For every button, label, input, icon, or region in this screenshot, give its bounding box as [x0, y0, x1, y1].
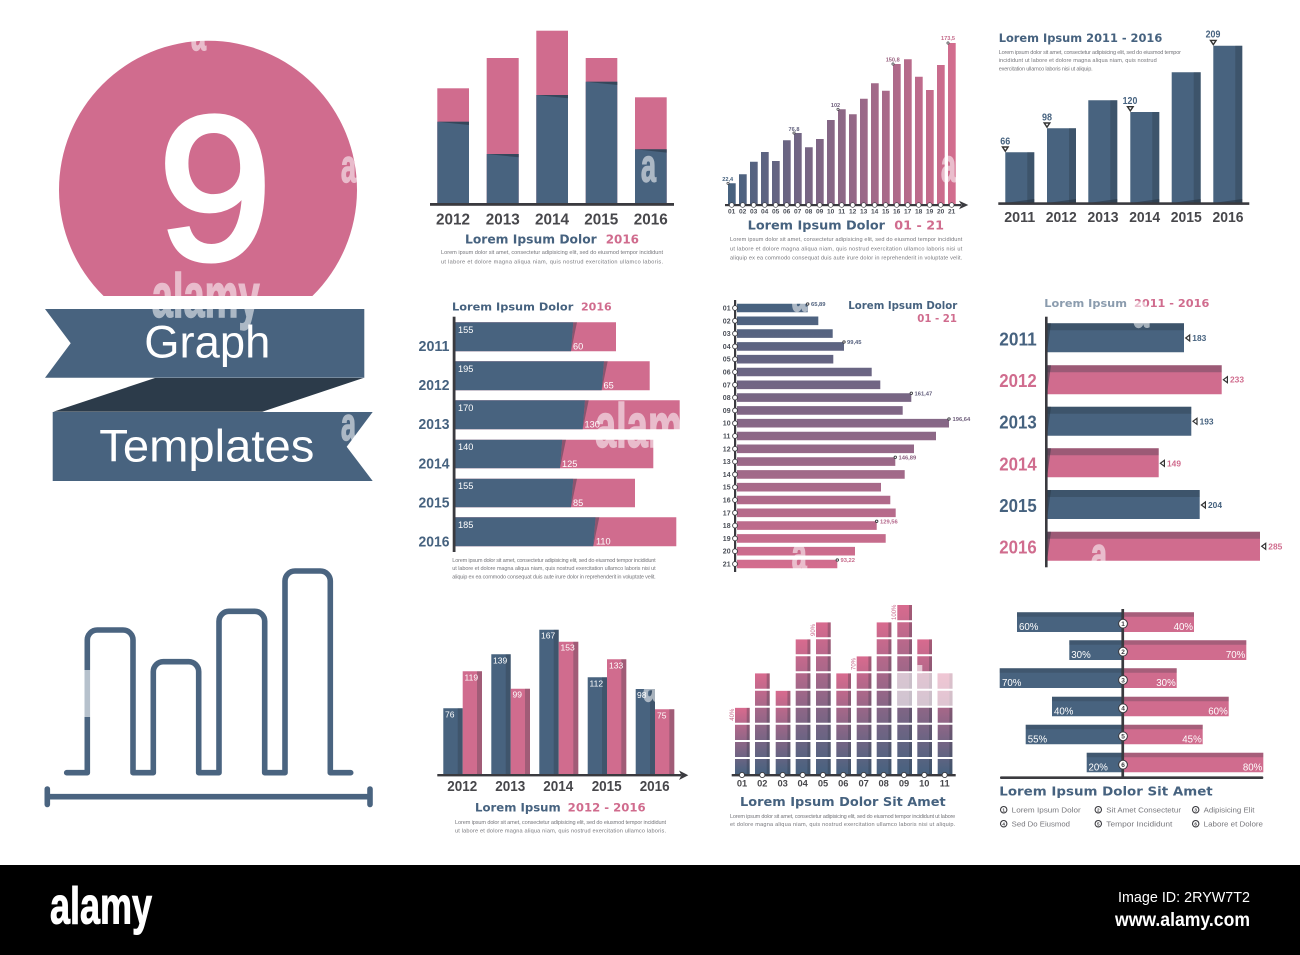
panel: diverging bar chart 1-6	[999, 609, 1263, 828]
panel: gradient column chart 01-21: 20	[937, 208, 945, 215]
panel: grouped column chart 2012-2016: 2016	[640, 779, 670, 795]
panel: gradient column chart 01-21	[722, 36, 968, 262]
panel: gradient horizontal bars 01-21: 07	[723, 382, 731, 389]
panel: stacked horizontal bars 2011-2016: 110	[596, 537, 611, 547]
panel: gradient column chart 01-21: 17	[904, 208, 912, 215]
panel: labelled horizontal bars 2011-2016: 2014	[999, 454, 1037, 474]
panel: gradient column chart 01-21: 22,4	[722, 177, 734, 183]
legend	[1000, 805, 1263, 828]
panel: labelled horizontal bars 2011-2016: 285	[1268, 541, 1283, 551]
legend: 6	[1194, 821, 1197, 826]
panel: stacked cell column chart 01-11: 60%	[933, 673, 939, 686]
panel: grouped column chart 2012-2016: 133	[609, 660, 623, 670]
panel: diverging bar chart 1-6: 5	[1121, 734, 1125, 741]
panel: stacked cell column chart 01-11: 70%	[852, 657, 858, 670]
watermark overlays: a	[643, 659, 658, 711]
legend: Lorem Ipsum Dolor	[1012, 805, 1081, 814]
panel: gradient horizontal bars 01-21: 129,56	[880, 519, 899, 525]
icon: outlined bar graph	[47, 571, 370, 804]
panel: gradient column chart 01-21: 09	[816, 208, 824, 215]
panel: diverging bar chart 1-6: 6	[1121, 762, 1125, 769]
panel: stacked column chart 2012-2016: 2016	[634, 212, 668, 228]
panel: labelled horizontal bars 2011-2016: 2012	[999, 371, 1037, 391]
panel: stacked horizontal bars 2011-2016: 60	[573, 342, 583, 352]
panel: gradient column chart 01-21: 10	[827, 208, 835, 215]
panel: shaded column chart 2011-2016: Lorem Ipsum 2011 - 2016	[999, 31, 1162, 45]
panel: shaded column chart 2011-2016: Lorem ipsum dolor sit amet, consectetur adipisicing elit, sed do eiusmod tempor	[999, 50, 1181, 56]
panel: gradient column chart 01-21: 21	[948, 208, 956, 215]
panel: shaded column chart 2011-2016: 2013	[1088, 209, 1118, 226]
panel: shaded column chart 2011-2016: 120	[1123, 96, 1138, 107]
panel: gradient column chart 01-21: ut labore et dolore magna aliqua niam, quis nostrud exercitation ullamco laboris nisi ut	[730, 246, 963, 252]
watermark overlays	[84, 8, 1149, 717]
panel: gradient horizontal bars 01-21: 19	[723, 536, 731, 543]
watermark overlays: a	[341, 398, 356, 450]
panel: gradient horizontal bars 01-21: 17	[723, 510, 731, 517]
panel: grouped column chart 2012-2016: 75	[657, 710, 667, 720]
panel: grouped column chart 2012-2016: 76	[445, 709, 455, 719]
panel: grouped column chart 2012-2016: Lorem Ipsum	[475, 800, 561, 814]
panel: stacked horizontal bars 2011-2016: 2011	[418, 338, 450, 355]
panel: grouped column chart 2012-2016: 167	[541, 631, 555, 641]
panel: gradient horizontal bars 01-21: 14	[723, 472, 731, 479]
panel: labelled horizontal bars 2011-2016: 2013	[999, 413, 1037, 433]
panel: stacked cell column chart 01-11: 01	[737, 778, 747, 788]
watermark overlays: a	[792, 269, 807, 321]
watermark overlays: a	[1091, 528, 1107, 580]
panel: grouped column chart 2012-2016: 139	[493, 655, 507, 665]
cover badge: pink circle with number 9	[59, 41, 357, 303]
panel: gradient horizontal bars 01-21: Lorem Ipsum Dolor	[848, 300, 958, 312]
panel: diverging bar chart 1-6: 40%	[1054, 706, 1074, 717]
panel: grouped column chart 2012-2016: 2012 - 2016	[568, 800, 646, 814]
panel: gradient column chart 01-21: 19	[926, 208, 934, 215]
panel: stacked cell column chart 01-11: 100%	[892, 604, 898, 620]
panel: stacked column chart 2012-2016: 2012	[436, 212, 470, 228]
panel: gradient horizontal bars 01-21: 04	[723, 344, 731, 351]
watermark overlays: a	[1133, 285, 1149, 337]
panel: gradient horizontal bars 01-21: 08	[723, 395, 731, 402]
panel: stacked cell column chart 01-11: et dolore magna aliqua niam, quis nostrud exercitation ullamco laboris nisi ut aliquip.	[730, 822, 956, 828]
panel: stacked column chart 2012-2016: Lorem Ipsum Dolor	[465, 232, 597, 246]
panel: stacked cell column chart 01-11: 09	[899, 778, 909, 788]
panel: stacked horizontal bars 2011-2016: 140	[458, 442, 473, 452]
panel: gradient column chart 01-21: 07	[794, 208, 802, 215]
panel: stacked horizontal bars 2011-2016: 170	[458, 403, 473, 413]
panel: gradient horizontal bars 01-21: 18	[723, 523, 731, 530]
watermark overlays: alamy	[152, 262, 260, 331]
panel: labelled horizontal bars 2011-2016: 2016	[999, 538, 1037, 558]
panel: grouped column chart 2012-2016: 2013	[495, 779, 525, 795]
panel: gradient horizontal bars 01-21: 16	[723, 498, 731, 504]
panel: stacked horizontal bars 2011-2016: 65	[604, 381, 614, 391]
panel: gradient horizontal bars 01-21: 09	[723, 408, 731, 415]
panel: labelled horizontal bars 2011-2016	[999, 298, 1283, 567]
panel: gradient horizontal bars 01-21: 196,64	[952, 417, 971, 423]
panel: stacked horizontal bars 2011-2016: 195	[458, 364, 473, 374]
panel: gradient horizontal bars 01-21: 03	[723, 331, 731, 338]
panel: diverging bar chart 1-6: 55%	[1028, 734, 1047, 745]
watermark overlays: a	[641, 140, 656, 192]
panel: gradient column chart 01-21: 150,8	[886, 58, 900, 64]
panel: gradient horizontal bars 01-21: 01	[723, 306, 731, 312]
panel: stacked horizontal bars 2011-2016: 2012	[418, 377, 450, 394]
panel: grouped column chart 2012-2016: 2014	[543, 779, 573, 795]
panel: shaded column chart 2011-2016: 2015	[1171, 209, 1202, 226]
watermark overlays: a	[191, 8, 206, 60]
panel: stacked horizontal bars 2011-2016: ut labore et dolore magna aliqua niam, quis nostrud exercitation ullamco laboris nisi ut	[452, 566, 656, 572]
panel: gradient column chart 01-21: 16	[893, 208, 901, 215]
panel: labelled horizontal bars 2011-2016: 2011 - 2016	[1134, 298, 1209, 310]
panel: gradient column chart 01-21: 11	[838, 208, 846, 215]
panel: gradient column chart 01-21: 14	[871, 208, 879, 215]
panel: stacked cell column chart 01-11: 07	[859, 778, 869, 788]
panel: diverging bar chart 1-6: 80%	[1243, 762, 1263, 773]
panel: gradient horizontal bars 01-21: 15	[723, 485, 731, 492]
panel: gradient horizontal bars 01-21: 146,89	[898, 455, 917, 461]
panel: gradient horizontal bars 01-21: 12	[723, 446, 731, 453]
panel: gradient column chart 01-21: Lorem ipsum dolor sit amet, consectetur adipisicing elit, sed do eiusmod tempor incididunt	[730, 237, 963, 243]
legend: 4	[1002, 821, 1005, 826]
panel: stacked horizontal bars 2011-2016: 2015	[418, 494, 450, 511]
panel: labelled horizontal bars 2011-2016: 204	[1208, 500, 1222, 510]
footer: black alamy bar: alamy	[50, 877, 152, 935]
panel: gradient column chart 01-21: 102	[831, 103, 840, 109]
panel: gradient horizontal bars 01-21: 10	[723, 421, 731, 428]
panel: gradient column chart 01-21: 03	[750, 208, 758, 215]
panel: gradient column chart 01-21: 08	[805, 208, 813, 215]
panel: labelled horizontal bars 2011-2016: Lorem Ipsum	[1044, 298, 1127, 310]
panel: grouped column chart 2012-2016: 153	[560, 643, 575, 653]
panel: gradient horizontal bars 01-21: 13	[723, 459, 731, 466]
panel: gradient column chart 01-21: 01	[728, 208, 736, 215]
panel: grouped column chart 2012-2016: 112	[590, 678, 603, 688]
panel: shaded column chart 2011-2016: 98	[1042, 113, 1052, 124]
legend: 3	[1194, 807, 1197, 812]
panel: stacked cell column chart 01-11: 08	[879, 778, 889, 788]
legend: Tempor Incididunt	[1106, 819, 1173, 828]
panel: diverging bar chart 1-6: 45%	[1182, 734, 1202, 745]
panel: gradient horizontal bars 01-21: 20	[723, 549, 731, 556]
panel: shaded column chart 2011-2016: 2012	[1046, 209, 1077, 226]
panel: stacked horizontal bars 2011-2016	[418, 300, 680, 581]
panel: diverging bar chart 1-6: 60%	[1019, 622, 1039, 633]
panel: labelled horizontal bars 2011-2016: 193	[1200, 416, 1214, 426]
legend: 2	[1097, 807, 1100, 812]
ribbon banner: Graph Templates: Graph	[144, 316, 270, 367]
panel: stacked horizontal bars 2011-2016: 2014	[418, 455, 450, 472]
panel: gradient horizontal bars 01-21: 01 - 21	[917, 313, 957, 325]
watermark overlays: a	[341, 140, 356, 192]
panel: stacked column chart 2012-2016: ut labore et dolore magna aliqua niam, quis nostrud exercitation ullamco laboris.	[441, 260, 663, 266]
panel: stacked column chart 2012-2016: 2013	[486, 212, 520, 228]
panel: stacked column chart 2012-2016: 2015	[584, 212, 618, 228]
panel: grouped column chart 2012-2016: ut labore et dolore magna aliqua niam, quis nostrud exercitation ullamco laboris.	[455, 829, 666, 835]
panel: diverging bar chart 1-6: 20%	[1088, 762, 1108, 773]
panel: labelled horizontal bars 2011-2016: 2015	[999, 496, 1037, 516]
panel: gradient horizontal bars 01-21: 99,45	[847, 340, 862, 346]
panel: stacked cell column chart 01-11: 40%	[730, 708, 736, 721]
legend: Adipisicing Elit	[1204, 805, 1255, 814]
panel: stacked column chart 2012-2016: 2014	[535, 212, 569, 228]
panel: gradient column chart 01-21: 12	[849, 208, 857, 215]
panel: diverging bar chart 1-6: 30%	[1071, 650, 1091, 661]
panel: stacked cell column chart 01-11: 06	[838, 778, 848, 788]
panel: diverging bar chart 1-6: 70%	[1002, 678, 1022, 689]
panel: gradient horizontal bars 01-21: 161,47	[914, 391, 932, 397]
panel: gradient column chart 01-21: 13	[860, 208, 868, 215]
panel: gradient column chart 01-21: 06	[783, 208, 791, 215]
legend: Sed Do Eiusmod	[1012, 819, 1070, 828]
panel: stacked cell column chart 01-11: 90%	[811, 623, 817, 636]
panel: stacked cell column chart 01-11	[730, 604, 956, 828]
panel: gradient column chart 01-21: 15	[882, 208, 890, 215]
panel: stacked horizontal bars 2011-2016: 2016	[581, 300, 612, 314]
panel: labelled horizontal bars 2011-2016: 149	[1167, 458, 1181, 468]
panel: grouped column chart 2012-2016: 98	[637, 690, 647, 700]
panel: stacked horizontal bars 2011-2016: 2013	[418, 416, 450, 433]
panel: stacked cell column chart 01-11: 02	[757, 778, 767, 788]
panel: labelled horizontal bars 2011-2016: 2011	[999, 329, 1037, 349]
footer: black alamy bar: Image ID: 2RYW7T2	[1118, 889, 1250, 906]
panel: diverging bar chart 1-6: Lorem Ipsum Dolor Sit Amet	[999, 785, 1213, 799]
panel: gradient column chart 01-21: 05	[772, 208, 780, 215]
panel: gradient column chart 01-21: 02	[739, 208, 747, 215]
panel: stacked cell column chart 01-11: 05	[818, 778, 828, 788]
panel: labelled horizontal bars 2011-2016: 183	[1192, 333, 1207, 343]
watermark overlays: alamy	[595, 392, 703, 461]
panel: stacked cell column chart 01-11: 04	[798, 778, 809, 788]
panel: stacked horizontal bars 2011-2016: 85	[573, 498, 583, 508]
panel: stacked horizontal bars 2011-2016: 2016	[418, 533, 450, 550]
panel: grouped column chart 2012-2016: 2012	[447, 779, 477, 795]
panel: gradient column chart 01-21: Lorem Ipsum Dolor	[748, 218, 886, 232]
legend: Sit Amet Consectetur	[1106, 805, 1182, 814]
panel: shaded column chart 2011-2016: 66	[1000, 136, 1011, 148]
panel: gradient horizontal bars 01-21: 02	[723, 318, 731, 325]
panel: stacked horizontal bars 2011-2016: Lorem ipsum dolor sit amet, consectetur adipisicing elit, sed do eiusmod tempor incididunt	[452, 558, 656, 564]
ribbon banner: Graph Templates: Templates	[99, 421, 314, 472]
ribbon banner: Graph Templates	[45, 309, 373, 481]
panel: grouped column chart 2012-2016: 119	[464, 672, 478, 682]
panel: stacked column chart 2012-2016	[430, 31, 674, 266]
panel: diverging bar chart 1-6: 30%	[1156, 678, 1176, 689]
watermark overlays: a	[792, 528, 807, 580]
panel: stacked cell column chart 01-11: Lorem Ipsum Dolor Sit Amet	[740, 795, 946, 809]
panel: stacked horizontal bars 2011-2016: 155	[458, 481, 473, 491]
panel: stacked cell column chart 01-11: 03	[778, 778, 788, 788]
panel: stacked cell column chart 01-11: 11	[940, 778, 950, 788]
legend: 5	[1097, 821, 1100, 826]
panel: diverging bar chart 1-6: 60%	[1208, 706, 1228, 717]
panel: shaded column chart 2011-2016: exercitation ullamco laboris nisi ut aliquip.	[999, 67, 1093, 73]
panel: diverging bar chart 1-6: 40%	[1174, 622, 1193, 633]
panel: stacked horizontal bars 2011-2016: 125	[562, 459, 577, 469]
legend: 1	[1002, 807, 1005, 812]
panel: stacked column chart 2012-2016: 2016	[606, 232, 639, 246]
panel: stacked horizontal bars 2011-2016: 130	[584, 420, 600, 430]
panel: gradient horizontal bars 01-21: 05	[723, 357, 731, 364]
watermark overlays: a	[941, 140, 956, 192]
panel: gradient column chart 01-21: 04	[761, 208, 769, 215]
panel: gradient horizontal bars 01-21: 93,22	[840, 558, 855, 564]
panel: gradient horizontal bars 01-21: 65,89	[811, 302, 826, 308]
panel: grouped column chart 2012-2016: Lorem ipsum dolor sit amet, consectetur adipisicing elit, sed do eiusmod tempor incididunt	[455, 820, 666, 826]
panel: gradient column chart 01-21: 18	[915, 208, 923, 215]
panel: gradient column chart 01-21: 76,8	[789, 127, 799, 133]
panel: stacked horizontal bars 2011-2016: Lorem Ipsum Dolor	[452, 300, 574, 314]
panel: shaded column chart 2011-2016	[998, 30, 1249, 226]
panel: shaded column chart 2011-2016: 2014	[1129, 209, 1161, 226]
panel: diverging bar chart 1-6: 4	[1121, 706, 1125, 713]
panel: stacked horizontal bars 2011-2016: 155	[458, 325, 473, 335]
panel: gradient column chart 01-21: aliquip ex ea commodo consequat duis aute irure dolor in reprehenderit in voluptate velit.	[730, 256, 963, 262]
panel: diverging bar chart 1-6: 70%	[1226, 650, 1246, 661]
panel: gradient column chart 01-21: 01 - 21	[894, 218, 944, 232]
panel: shaded column chart 2011-2016: 209	[1206, 30, 1221, 41]
legend: Labore et Dolore	[1204, 819, 1263, 828]
panel: gradient horizontal bars 01-21: 06	[723, 370, 731, 376]
panel: grouped column chart 2012-2016: 99	[512, 690, 522, 700]
panel: stacked column chart 2012-2016: Lorem ipsum dolor sit amet, consectetur adipisicing elit, sed do eiusmod tempor incididunt	[441, 250, 663, 256]
panel: stacked horizontal bars 2011-2016: aliquip ex ea commodo consequat duis aute irure dolor in reprehenderit in voluptate velit.	[452, 575, 656, 581]
panel: stacked cell column chart 01-11: 10	[919, 778, 929, 788]
cover badge: pink circle with number 9: 9	[158, 74, 272, 303]
panel: shaded column chart 2011-2016: 2016	[1212, 209, 1244, 226]
panel: grouped column chart 2012-2016: 2015	[592, 779, 622, 795]
panel: shaded column chart 2011-2016: 2011	[1004, 209, 1035, 226]
panel: gradient horizontal bars 01-21	[723, 300, 971, 572]
panel: stacked cell column chart 01-11: Lorem ipsum dolor sit amet, consectetur adipisicing elit, sed do eiusmod tempor incididunt ut labore	[730, 814, 955, 820]
panel: gradient column chart 01-21: 173,5	[941, 36, 955, 42]
panel: diverging bar chart 1-6: 1	[1121, 621, 1125, 628]
panel: gradient horizontal bars 01-21: 11	[723, 434, 731, 440]
panel: shaded column chart 2011-2016: incididunt ut labore et dolore magna aliqua niam, quis nostrud	[999, 58, 1157, 64]
panel: diverging bar chart 1-6: 3	[1121, 677, 1125, 684]
panel: diverging bar chart 1-6: 2	[1121, 649, 1125, 656]
panel: grouped column chart 2012-2016	[437, 630, 688, 835]
footer: black alamy bar	[0, 865, 1300, 955]
footer: black alamy bar: www.alamy.com	[1114, 910, 1250, 931]
panel: gradient horizontal bars 01-21: 21	[723, 562, 731, 568]
panel: labelled horizontal bars 2011-2016: 233	[1230, 375, 1244, 385]
panel: stacked horizontal bars 2011-2016: 185	[458, 520, 473, 530]
